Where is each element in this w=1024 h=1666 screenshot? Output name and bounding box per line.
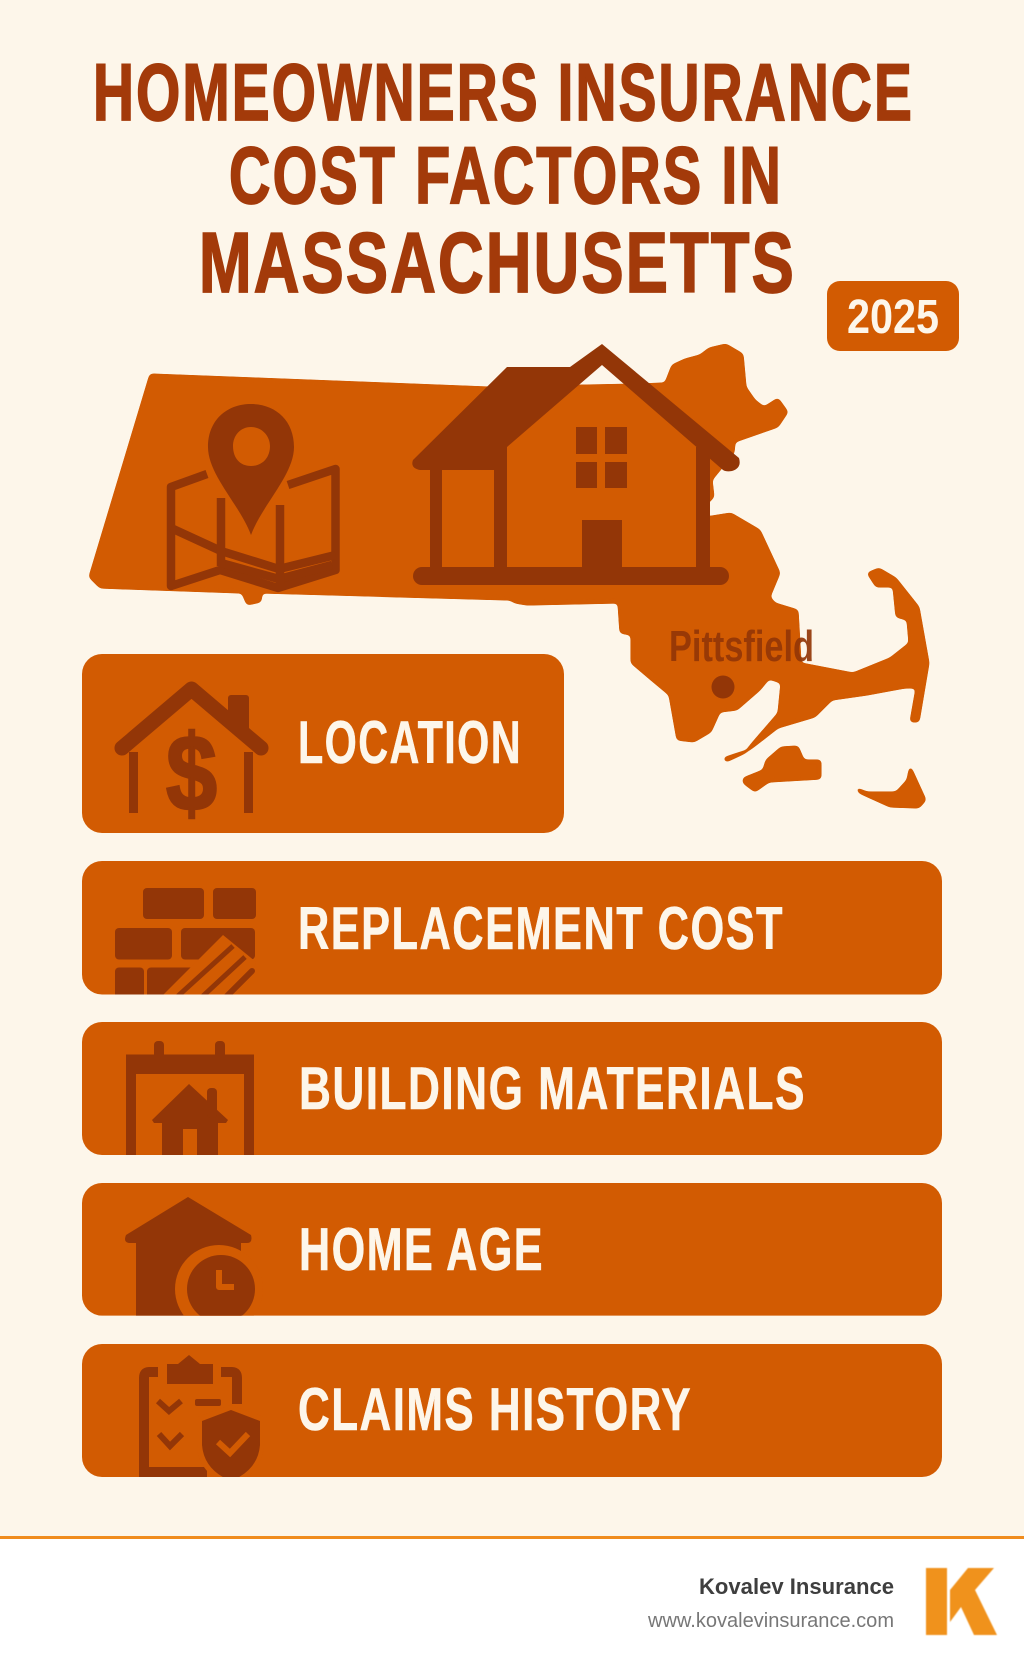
icon: calendar with house	[126, 1041, 254, 1160]
location pin	[208, 404, 294, 535]
label: claims history: CLAIMS HISTORY	[298, 1376, 692, 1443]
panel: home age	[82, 1183, 942, 1316]
icon: clipboard with shield	[144, 1355, 264, 1486]
panel: building materials	[82, 1022, 942, 1160]
map of Massachusetts	[89, 344, 929, 808]
icon: map with location pin	[171, 404, 336, 588]
icon: house	[412, 344, 740, 585]
city label: Pittsfield	[669, 622, 814, 698]
website: www.kovalevinsurance.com	[647, 1610, 894, 1632]
label: building materials: BUILDING MATERIALS	[299, 1055, 806, 1122]
icon: house with clock	[125, 1197, 255, 1316]
icon: bricks and pencil	[115, 888, 256, 1004]
icon: house with dollar sign: $	[166, 712, 217, 833]
island: Martha's Vineyard	[743, 746, 821, 792]
title: COST FACTORS IN	[229, 131, 783, 221]
year badge: 2025	[847, 291, 939, 344]
year badge	[827, 281, 959, 351]
label: home age: HOME AGE	[299, 1216, 544, 1283]
title: MASSACHUSETTS	[199, 216, 796, 311]
label: location: LOCATION	[298, 709, 522, 776]
panel: location	[82, 654, 564, 833]
title	[93, 48, 914, 311]
label: replacement cost: REPLACEMENT COST	[298, 895, 784, 962]
city label: Pittsfield: Pittsfield	[669, 622, 814, 671]
icon: house with dollar sign	[122, 689, 261, 833]
panel: replacement cost	[82, 861, 942, 1004]
mainland outline	[89, 344, 929, 762]
logo: K mark	[926, 1568, 997, 1635]
footer	[0, 1536, 1024, 1666]
island: Nantucket	[855, 765, 926, 808]
company name: Kovalev Insurance	[699, 1574, 894, 1599]
panel: claims history	[82, 1344, 942, 1486]
